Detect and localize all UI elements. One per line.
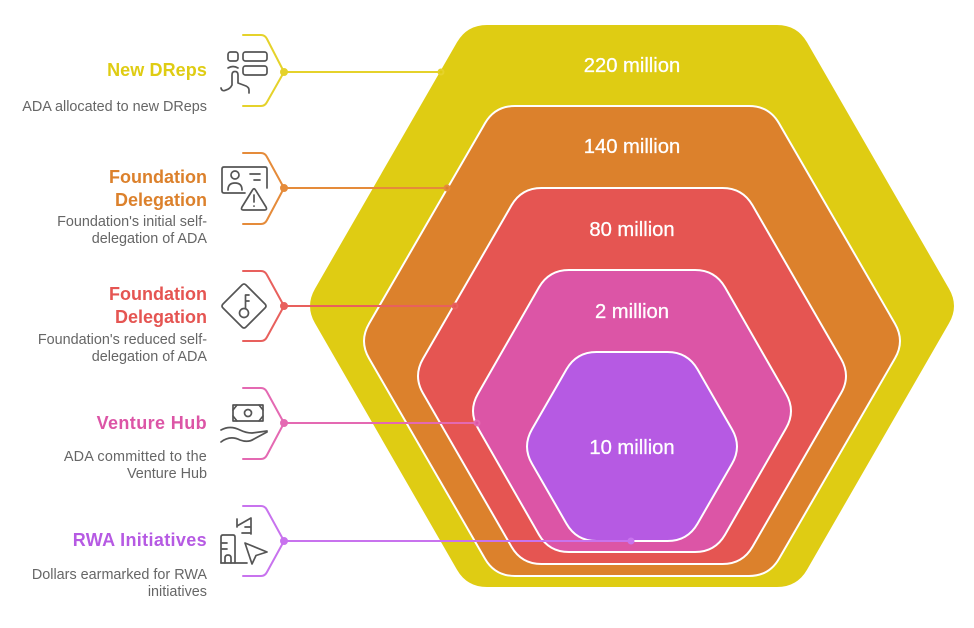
text: reduced self-delegation description: delegation of ADA [92,349,207,365]
icon: buildings and cursor [221,518,267,564]
panel: Foundation Delegation initial [57,153,450,247]
text: initial self-delegation description: delegation of ADA [92,231,207,247]
text: New DReps description: ADA allocated to new DReps [22,99,207,115]
hexagon: 10 million [527,352,737,541]
panel: New DReps [22,35,444,115]
heading: Foundation Delegation: Delegation [115,307,207,327]
icon: hand holding cash [221,405,267,442]
hexagon: 140 million: 140 million [584,136,680,158]
connector: Foundation initial [243,153,450,224]
icon: hand selecting list [221,52,267,93]
hexagon: 2 million [473,270,791,552]
hexagon: 220 million: 220 million [584,55,680,77]
hexagon: 2 million: 2 million [595,301,669,323]
connector: Venture Hub [243,388,480,459]
heading: New DReps: New DReps [107,60,207,80]
hexagon: 10 million: 10 million [589,437,675,459]
icon: ID card with warning [222,167,267,210]
heading: Foundation Delegation: Foundation [109,167,207,187]
panel: RWA Initiatives [32,506,634,600]
heading: RWA Initiatives: RWA Initiatives [73,530,207,550]
connector: Foundation reduced [243,271,458,341]
text: RWA description: initiatives [148,584,207,600]
nested hexagon chart [310,25,954,587]
text: reduced self-delegation description: Foundation's reduced self- [38,332,207,348]
hexagon: 80 million [418,188,846,564]
hexagon: 80 million: 80 million [589,219,675,241]
text: Venture Hub description: ADA committed to the [64,449,207,465]
heading: Foundation Delegation: Delegation [115,190,207,210]
panel: Foundation Delegation reduced [38,271,458,365]
text: Venture Hub description: Venture Hub [127,466,207,482]
connector: RWA Initiatives [243,506,634,576]
heading: Foundation Delegation: Foundation [109,284,207,304]
panel: Venture Hub [64,388,480,482]
heading: Venture Hub: Venture Hub [97,413,207,433]
text: RWA description: Dollars earmarked for RWA [32,567,207,583]
icon: diamond with key [222,284,266,328]
connector: New DReps [243,35,444,106]
text: initial self-delegation description: Foundation's initial self- [57,214,207,230]
